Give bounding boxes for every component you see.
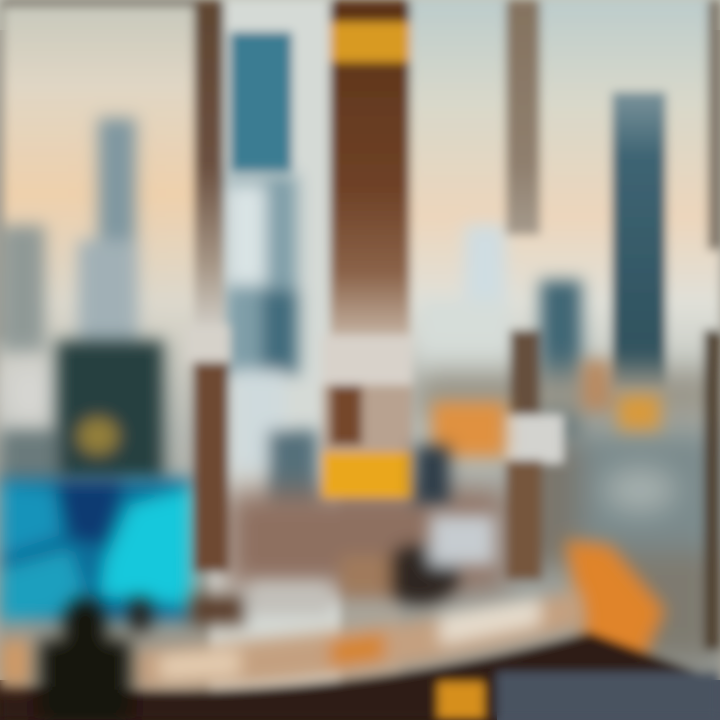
curved desk surface — [135, 590, 585, 690]
yellow band top of central column — [330, 22, 410, 62]
white and teal building reflection — [225, 175, 318, 510]
cyan and blue glow, lower left — [0, 478, 192, 622]
left desk edge glow — [0, 640, 30, 685]
brown column right — [505, 0, 563, 580]
edge column far right — [704, 0, 720, 650]
dark desk front — [0, 632, 720, 720]
brown central column — [322, 0, 412, 455]
yellow band lower central column — [322, 452, 412, 498]
dark silhouette foreground — [40, 597, 153, 720]
dark green building block — [0, 340, 164, 485]
distant buildings — [0, 118, 582, 440]
brown window column left — [186, 0, 230, 572]
lower city haze — [0, 360, 720, 660]
teal tower behind first column — [230, 32, 292, 172]
dark objects on desk — [190, 445, 495, 625]
tall dark tower on right — [612, 92, 666, 387]
orange city lights — [432, 360, 665, 665]
orange lamp at bottom — [438, 682, 484, 720]
